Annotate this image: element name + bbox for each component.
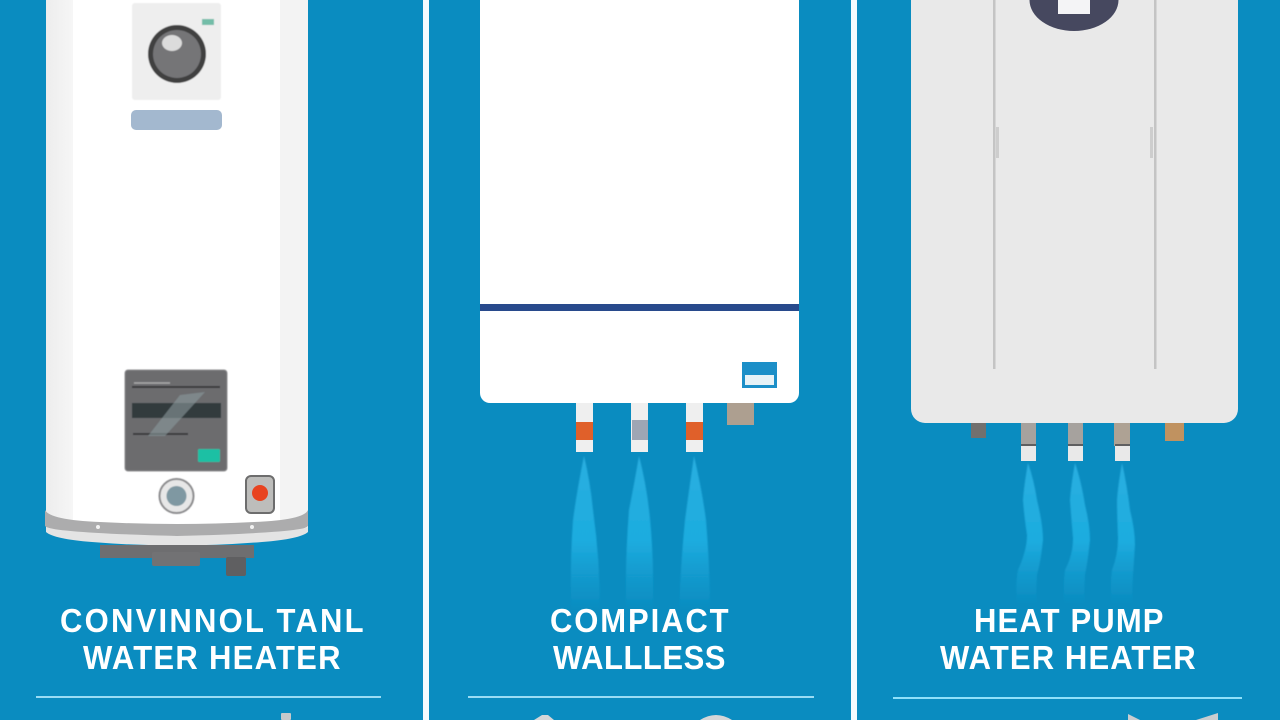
- icon stubs: [1128, 713, 1218, 720]
- title: WATER HEATER: [83, 639, 341, 676]
- title: [550, 602, 729, 676]
- bottom bracket and valve: [100, 545, 254, 576]
- title: COMPIACT: [550, 602, 729, 639]
- pipes: [576, 403, 754, 452]
- vertical seams: [993, 0, 1156, 369]
- panel: heat pump water heater: [893, 0, 1242, 720]
- panel: conventional tank water heater: [36, 0, 381, 720]
- rule: [893, 697, 1242, 699]
- blue label plate: [131, 110, 222, 130]
- title: HEAT PUMP: [974, 602, 1164, 639]
- tank body: [46, 0, 308, 545]
- water streams: [1016, 463, 1135, 604]
- gauge panel: [132, 3, 221, 100]
- water streams: [571, 456, 710, 610]
- rule: [36, 696, 381, 698]
- control badge: [1030, 0, 1118, 31]
- panel dividers: [423, 0, 857, 720]
- unit body: [480, 0, 799, 403]
- panel: compact wall unit: [468, 0, 814, 720]
- navy stripe: [480, 304, 799, 311]
- round vent: [160, 479, 194, 513]
- pipes: [971, 423, 1184, 461]
- title: WALLLESS: [553, 639, 725, 676]
- icon stub: [281, 713, 291, 720]
- unit body: [911, 0, 1238, 423]
- control display: [125, 370, 227, 471]
- rule: [468, 696, 814, 698]
- title: CONVINNOL TANL: [60, 602, 364, 639]
- tank bottom band: [45, 510, 308, 546]
- status icon: [742, 362, 777, 388]
- icon stubs: [534, 715, 732, 720]
- title: [940, 602, 1196, 676]
- title: [60, 602, 364, 676]
- title: WATER HEATER: [940, 639, 1196, 676]
- red button: [246, 476, 274, 513]
